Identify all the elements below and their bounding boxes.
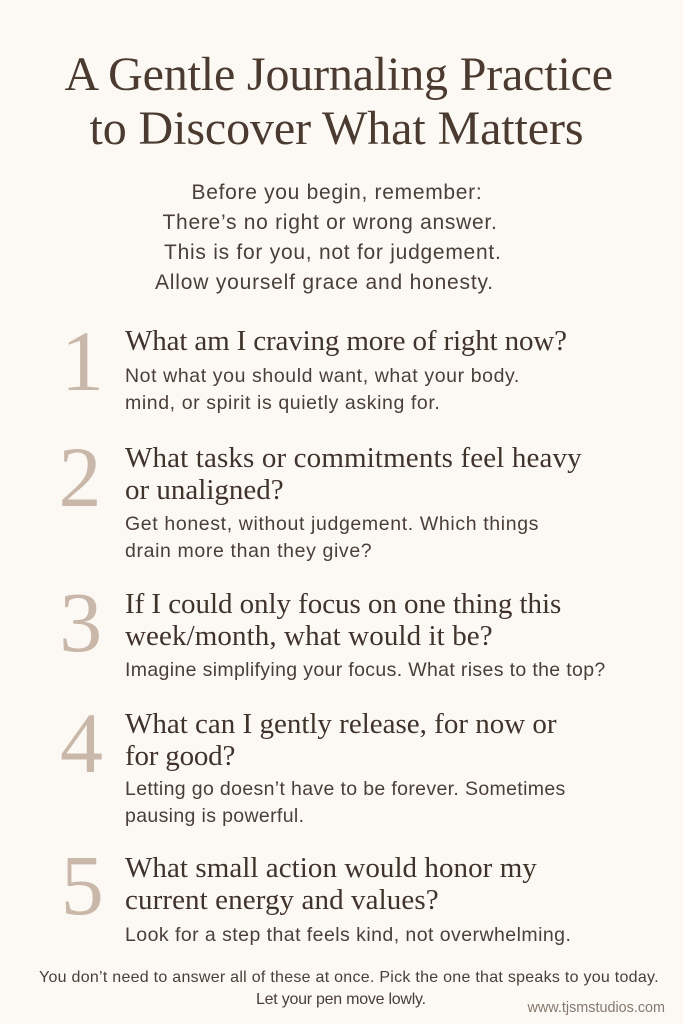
item 4 [60, 694, 566, 826]
item 3 [59, 574, 606, 681]
question 1: What am I craving more of right now? [125, 325, 567, 357]
description 4 [125, 778, 566, 826]
title: to Discover What Matters [90, 102, 583, 155]
description 1: mind, or spirit is quietly asking for. [125, 392, 440, 414]
question 4: for good? [125, 740, 235, 772]
description 4: pausing is powerful. [125, 804, 304, 826]
intro text: Allow yourself grace and honesty. [155, 271, 494, 294]
item 1 [61, 313, 567, 414]
website url: www.tjsmstudios.com [528, 1000, 665, 1016]
question 3: If I could only focus on one thing this [125, 588, 561, 620]
title: A Gentle Journaling Practice [64, 48, 613, 101]
number 3: 3 [59, 574, 102, 670]
question 2: or unaligned? [125, 474, 284, 506]
description 2: Get honest, without judgement. Which things [125, 513, 539, 535]
closing note: Let your pen move lowly. [256, 991, 426, 1008]
number 5: 5 [61, 837, 104, 933]
number 1: 1 [61, 313, 104, 409]
question 2: What tasks or commitments feel heavy [125, 442, 582, 474]
description 3: Imagine simplifying your focus. What rises to the top? [125, 659, 606, 681]
closing note [39, 969, 659, 1008]
closing note: You don’t need to answer all of these at once. Pick the one that speaks to you today. [39, 969, 659, 986]
number 2: 2 [58, 428, 102, 524]
question 5 [125, 852, 537, 916]
intro text: This is for you, not for judgement. [164, 241, 502, 264]
question 3: week/month, what would it be? [125, 620, 493, 652]
intro text: Before you begin, remember: [192, 181, 482, 204]
number 4: 4 [60, 694, 103, 790]
question 4: What can I gently release, for now or [125, 708, 557, 740]
question 4 [125, 708, 557, 772]
description 2 [125, 513, 539, 562]
question 3 [125, 588, 561, 652]
question 5: What small action would honor my [125, 852, 537, 884]
title [64, 48, 613, 155]
question 5: current energy and values? [125, 884, 439, 916]
description 2: drain more than they give? [125, 540, 372, 562]
description 4: Letting go doesn’t have to be forever. Sometimes [125, 778, 566, 800]
description 1: Not what you should want, what your body. [125, 365, 520, 387]
intro text: There’s no right or wrong answer. [162, 211, 498, 234]
question 2 [125, 442, 582, 506]
item 5 [61, 837, 571, 946]
item 2 [58, 428, 582, 562]
description 5: Look for a step that feels kind, not overwhelming. [125, 924, 571, 946]
intro text [155, 181, 502, 294]
description 1 [125, 365, 520, 414]
